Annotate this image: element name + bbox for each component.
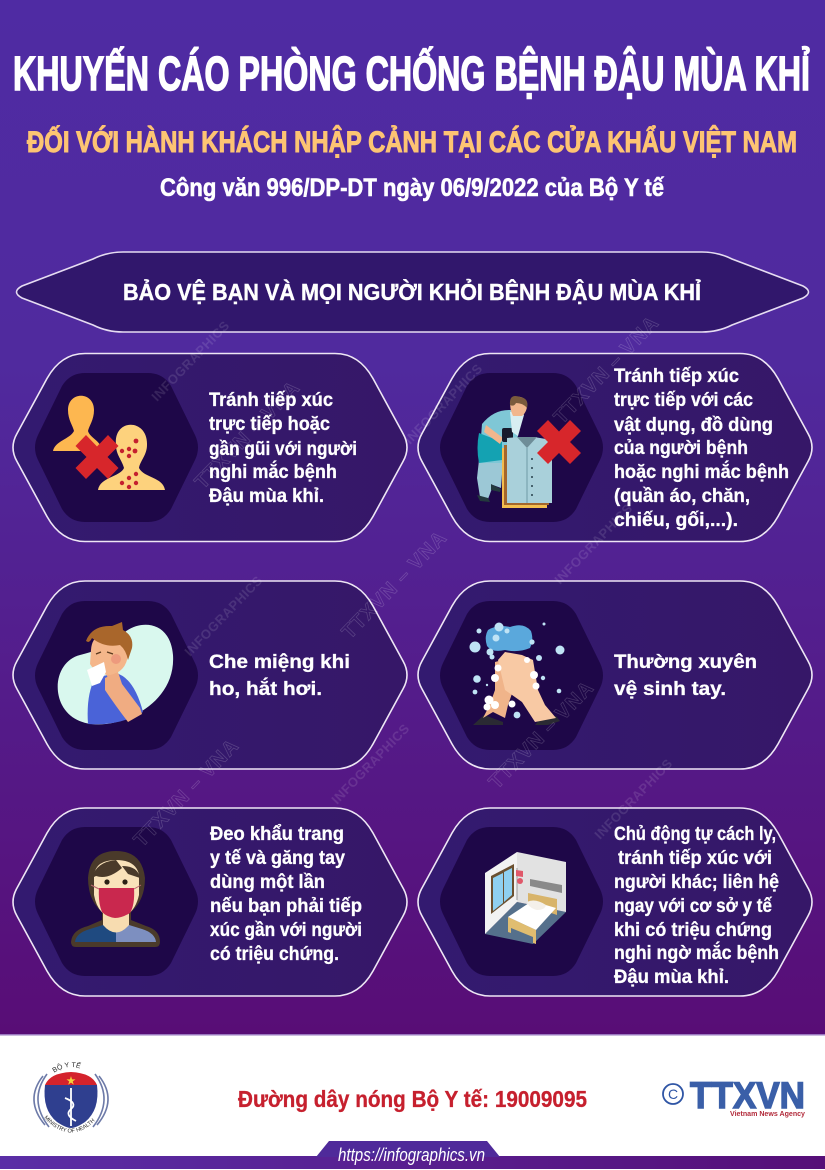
ministry of health logo: MINISTRY OF HEALTH (44, 1115, 95, 1132)
watermarks: TTXVN – VNA (338, 527, 452, 643)
text: wear mask and gloves (210, 823, 362, 965)
footer (0, 1034, 825, 1169)
text: self isolate: Đậu mùa khỉ. (614, 966, 729, 988)
text: wash hands (614, 651, 757, 700)
ministry of health logo: ★ (67, 1076, 76, 1087)
text: avoid contact with belongings: trực tiếp với các (614, 389, 753, 411)
text: cover mouth (209, 651, 350, 700)
TTXVN logo: Vietnam News Agency (730, 1109, 806, 1118)
text: avoid contact with belongings: Tránh tiếp xúc (614, 365, 739, 387)
watermarks: INFOGRAPHICS (591, 756, 676, 842)
watermarks: INFOGRAPHICS (551, 501, 636, 587)
text: avoid contact with belongings: hoặc nghi mắc bệnh (614, 459, 789, 483)
website url: https://infographics.vn (338, 1145, 485, 1165)
text: self isolate: nghi ngờ mắc bệnh (614, 940, 779, 964)
panel: self isolate (418, 808, 812, 996)
panel: cover mouth (13, 581, 407, 769)
text: wear mask and gloves: Đeo khẩu trang (210, 823, 344, 845)
watermarks: INFOGRAPHICS (328, 721, 413, 807)
ministry of health logo: BỘ Y TẾ (52, 1062, 82, 1072)
text: cover mouth: Che miệng khi (209, 651, 350, 673)
banner (16, 252, 808, 332)
watermarks (130, 312, 676, 851)
text: self isolate (614, 823, 779, 988)
document reference: Công văn 996/DP-DT ngày 06/9/2022 của Bộ Y tế (160, 174, 664, 202)
ministry of health logo (33, 1062, 109, 1132)
icon: person handling shirt with red cross (477, 396, 581, 508)
watermarks: TTXVN – VNA (191, 377, 305, 493)
text: avoid contact with belongings: vật dụng, đồ dùng (614, 414, 773, 436)
text: wear mask and gloves: y tế và găng tay (210, 847, 345, 869)
watermarks: INFOGRAPHICS (401, 361, 486, 447)
panel: wear mask and gloves (13, 808, 407, 996)
text: self isolate: tránh tiếp xúc với (618, 847, 772, 869)
text: wear mask and gloves: xúc gần với người (210, 919, 362, 941)
TTXVN logo: C (668, 1086, 678, 1102)
text: self isolate: ngay với cơ sở y tế (614, 895, 772, 917)
bottom band (0, 1141, 825, 1169)
watermarks: INFOGRAPHICS (148, 318, 233, 404)
icon: two people with red cross (53, 396, 165, 490)
text: wear mask and gloves: có triệu chứng. (210, 943, 339, 965)
hotline: Đường dây nóng Bộ Y tế: 19009095 (238, 1086, 587, 1112)
icon: isolation room with bed (485, 852, 566, 944)
watermarks: TTXVN – VNA (485, 677, 599, 793)
icon: person wearing red mask (71, 851, 160, 947)
icon: hands with soap sponge (470, 622, 564, 725)
text: avoid contact with people: gần gũi với người (209, 438, 357, 460)
panel: avoid contact with belongings (418, 354, 812, 542)
text: avoid contact with belongings: chiếu, gối,...). (614, 509, 738, 531)
text: avoid contact with belongings: của người bệnh (614, 437, 748, 459)
text: avoid contact with belongings (614, 365, 789, 531)
text: avoid contact with belongings: (quần áo, chăn, (614, 485, 750, 507)
watermarks: INFOGRAPHICS (181, 573, 266, 659)
TTXVN logo: TTXVN (690, 1075, 805, 1116)
text: avoid contact with people: Đậu mùa khỉ. (209, 485, 324, 507)
banner text: BẢO VỆ BẠN VÀ MỌI NGƯỜI KHỎI BỆNH ĐẬU MÙA KHỈ (123, 277, 702, 305)
text: avoid contact with people (209, 389, 357, 507)
watermarks: TTXVN – VNA (130, 735, 244, 851)
watermarks: TTXVN – VNA (550, 312, 664, 428)
text: avoid contact with people: trực tiếp hoặc (209, 413, 330, 435)
text: avoid contact with people: nghi mắc bệnh (209, 459, 337, 483)
text: wash hands: Thường xuyên (614, 651, 757, 673)
text: self isolate: Chủ động tự cách ly, (614, 823, 776, 845)
panel: avoid contact with people (13, 354, 407, 542)
panel: wash hands (418, 581, 812, 769)
icon: boy coughing into tissue (58, 622, 173, 724)
text: self isolate: người khác; liên hệ (614, 871, 779, 893)
text: wear mask and gloves: nếu bạn phải tiếp (210, 895, 362, 917)
text: cover mouth: ho, hắt hơi. (209, 676, 322, 700)
text: wear mask and gloves: dùng một lần (210, 871, 325, 893)
text: wash hands: vệ sinh tay. (614, 678, 726, 700)
text: self isolate: khi có triệu chứng (614, 919, 772, 941)
text: avoid contact with people: Tránh tiếp xúc (209, 389, 333, 411)
